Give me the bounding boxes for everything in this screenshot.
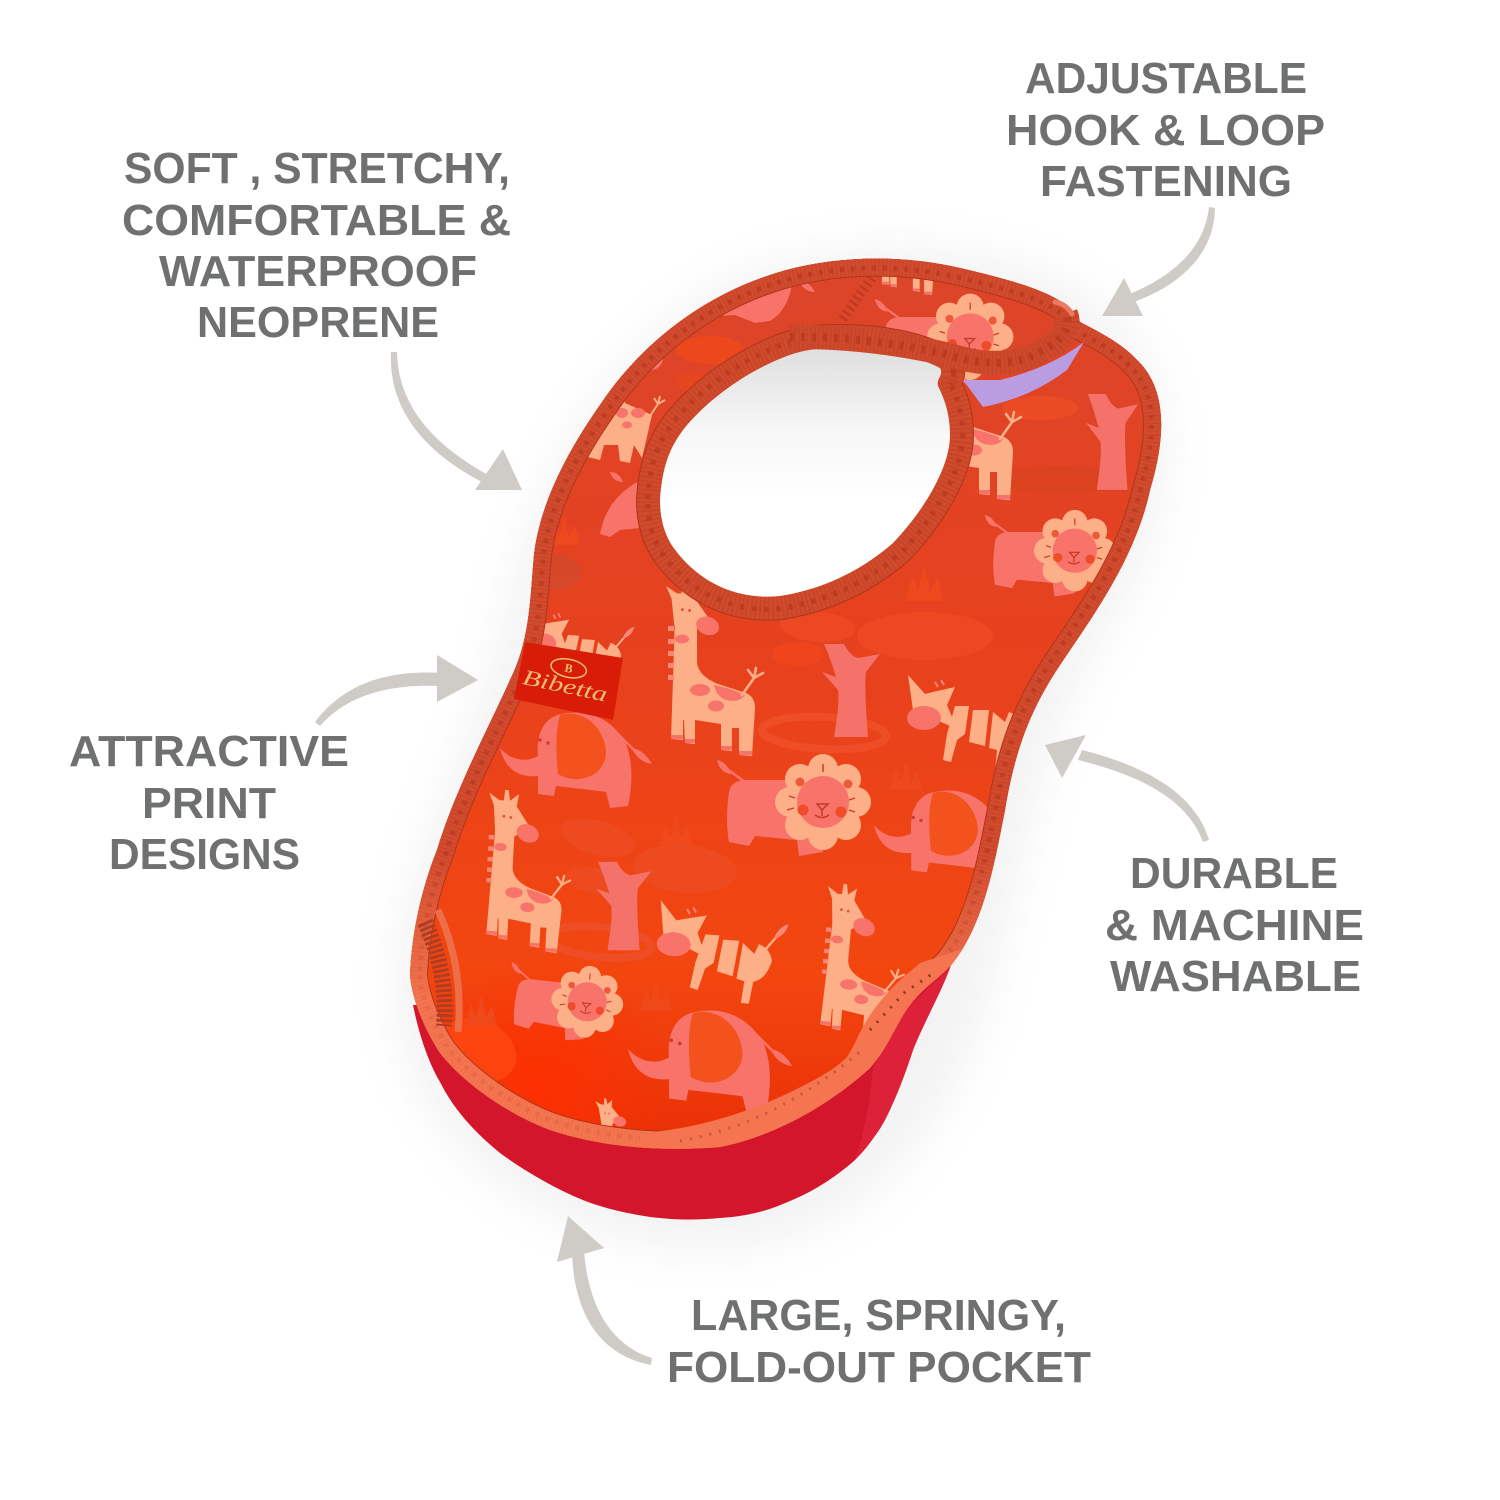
callout: large fold-out pocket <box>667 1291 1091 1392</box>
velcro tab <box>963 342 1084 407</box>
bib body <box>410 259 1161 1149</box>
callout: soft neoprene: SOFT , STRETCHY, <box>124 144 510 193</box>
zebras <box>526 608 1037 1006</box>
coral pocket edge <box>640 950 961 1149</box>
callout: adjustable hook and loop fastening: FASTENING <box>1040 157 1292 206</box>
callout: durable and machine washable <box>1105 849 1364 1001</box>
trees <box>596 394 1138 950</box>
shoulder giraffe <box>588 346 665 463</box>
callout: soft neoprene: COMFORTABLE & <box>122 196 511 245</box>
strap stitch line <box>842 273 875 320</box>
callout: large fold-out pocket: FOLD-OUT POCKET <box>667 1343 1091 1392</box>
arrow: adjustable fastening <box>1102 207 1215 316</box>
adjustable strap binding <box>790 302 1072 363</box>
pocket fold corner <box>425 910 459 1032</box>
brand label <box>514 642 623 720</box>
lion body under neck <box>600 472 640 537</box>
background shapes <box>446 336 1078 1080</box>
callout: adjustable hook and loop fastening: HOOK & LOOP <box>1006 106 1325 155</box>
elephants <box>500 712 1023 1114</box>
icon: grass tufts <box>465 515 943 1025</box>
callout: durable and machine washable: & MACHINE <box>1105 901 1364 950</box>
callout: durable and machine washable: WASHABLE <box>1110 952 1361 1001</box>
arrow: print designs <box>315 655 478 726</box>
callout: durable and machine washable: DURABLE <box>1130 849 1338 898</box>
lions <box>504 294 1116 1046</box>
callout: soft neoprene <box>122 144 511 347</box>
arrow: neoprene <box>391 352 522 490</box>
callout: large fold-out pocket: LARGE, SPRINGY, <box>691 1291 1066 1340</box>
bib product <box>410 209 1161 1219</box>
callout: attractive print designs: ATTRACTIVE <box>69 727 349 776</box>
callout: adjustable hook and loop fastening: ADJUSTABLE <box>1025 54 1307 103</box>
callout: attractive print designs: PRINT <box>142 779 276 828</box>
callout: attractive print designs <box>69 727 349 879</box>
bib shadow <box>395 249 1167 1250</box>
giraffes <box>481 209 1021 1190</box>
outer binding <box>410 259 1161 1149</box>
logo badge: B <box>563 661 574 676</box>
neck hole with binding <box>660 348 950 597</box>
arrow: durable <box>1045 735 1209 842</box>
arrow: pocket <box>557 1216 652 1365</box>
callout: soft neoprene: WATERPROOF <box>159 247 477 296</box>
brand name: Bibetta <box>520 664 610 707</box>
fold-out pocket <box>413 960 953 1220</box>
callout: attractive print designs: DESIGNS <box>109 830 300 879</box>
callout: adjustable hook and loop fastening <box>1006 54 1325 206</box>
animal print pattern <box>446 260 1138 1148</box>
callout: soft neoprene: NEOPRENE <box>197 298 439 347</box>
strap elephant fragment <box>722 284 815 323</box>
